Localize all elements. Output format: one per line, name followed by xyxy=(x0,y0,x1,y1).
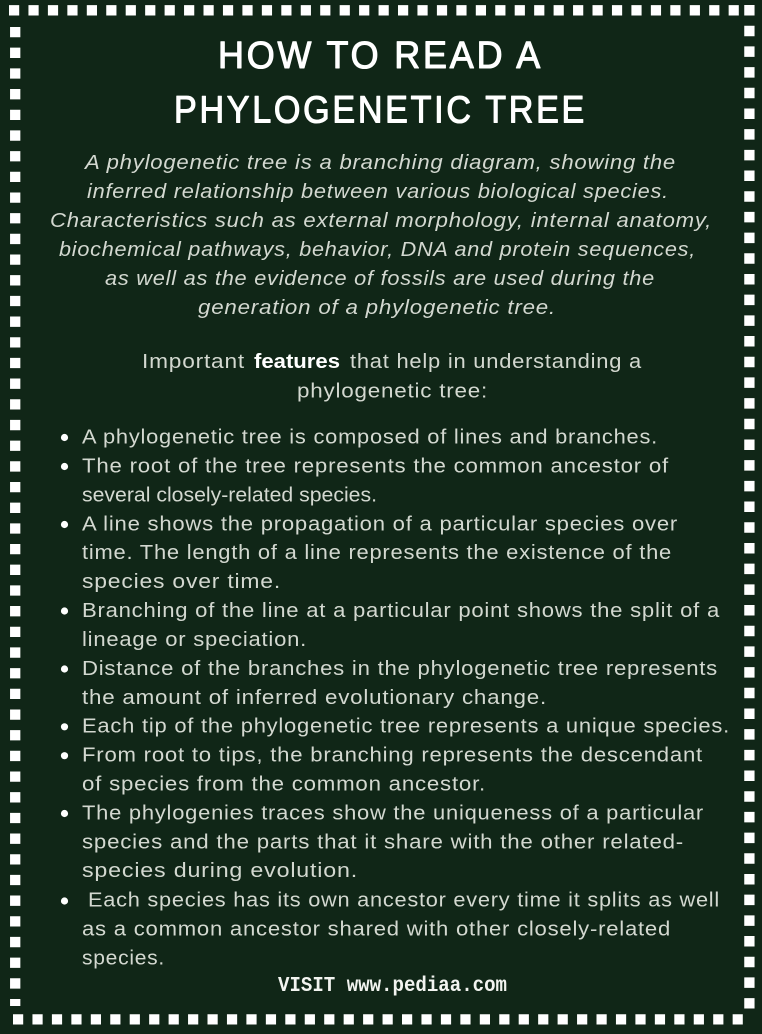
bullet: line propagation xyxy=(61,513,678,593)
bullet: distance of branches: the amount of inferred evolutionary change. xyxy=(82,687,547,709)
bullet: line propagation: A line shows the propagation of a particular species over xyxy=(82,513,678,535)
intro paragraph: A phylogenetic tree is a branching diagram, showing the xyxy=(84,152,676,174)
footer: visit link: VISIT www.pediaa.com xyxy=(278,975,507,998)
features subheading: Important xyxy=(142,351,245,373)
intro paragraph: generation of a phylogenetic tree. xyxy=(198,297,556,319)
intro paragraph: biochemical pathways, behavior, DNA and protein sequences, xyxy=(59,239,696,261)
bullet: own ancestor: as a common ancestor shared with other closely-related xyxy=(82,918,671,940)
bullet: own ancestor: Each species has its own ancestor every time it splits as well xyxy=(88,890,720,912)
features subheading: phylogenetic tree: xyxy=(297,380,488,402)
intro paragraph xyxy=(50,152,712,319)
bullet: root to tips: of species from the common ancestor. xyxy=(82,774,486,796)
bullet: line propagation: species over time. xyxy=(82,571,281,593)
bullet list of features xyxy=(61,426,730,969)
bullet: phylogenies traces xyxy=(61,802,704,882)
bullet: root to tips xyxy=(61,745,703,796)
features subheading: features xyxy=(254,351,340,373)
bullet: branching: lineage or speciation. xyxy=(82,629,307,651)
bullet: own ancestor xyxy=(61,890,720,969)
bullet: own ancestor: species. xyxy=(82,947,165,969)
bullet: lines and branches: A phylogenetic tree is composed of lines and branches. xyxy=(82,426,658,448)
title: HOW TO READ A xyxy=(218,35,543,77)
bullet: distance of branches: Distance of the branches in the phylogenetic tree represents xyxy=(82,658,718,680)
intro paragraph: Characteristics such as external morphology, internal anatomy, xyxy=(50,210,712,232)
bullet: phylogenies traces: species during evolution. xyxy=(82,860,358,882)
bullet: phylogenies traces: The phylogenies traces show the uniqueness of a particular xyxy=(82,802,704,824)
intro paragraph: as well as the evidence of fossils are used during the xyxy=(105,268,655,290)
bullet: root of the tree: several closely-related species. xyxy=(82,484,377,506)
features subheading: that help in understanding a xyxy=(350,351,642,373)
bullet: root of the tree xyxy=(61,455,669,506)
bullet: distance of branches xyxy=(61,658,718,709)
bullet: each tip: Each tip of the phylogenetic tree represents a unique species. xyxy=(82,716,730,738)
bullet: root of the tree: The root of the tree represents the common ancestor of xyxy=(82,455,669,477)
bullet: branching xyxy=(61,600,720,651)
intro paragraph: inferred relationship between various biological species. xyxy=(87,181,669,203)
bullet: line propagation: time. The length of a line represents the existence of the xyxy=(82,542,672,564)
title xyxy=(174,35,587,132)
bullet: branching: Branching of the line at a particular point shows the split of a xyxy=(82,600,720,622)
bullet: phylogenies traces: species and the parts that it share with the other related- xyxy=(82,831,684,853)
bullet: root to tips: From root to tips, the branching represents the descendant xyxy=(82,745,703,767)
features subheading xyxy=(142,351,642,402)
title: PHYLOGENETIC TREE xyxy=(174,90,587,132)
